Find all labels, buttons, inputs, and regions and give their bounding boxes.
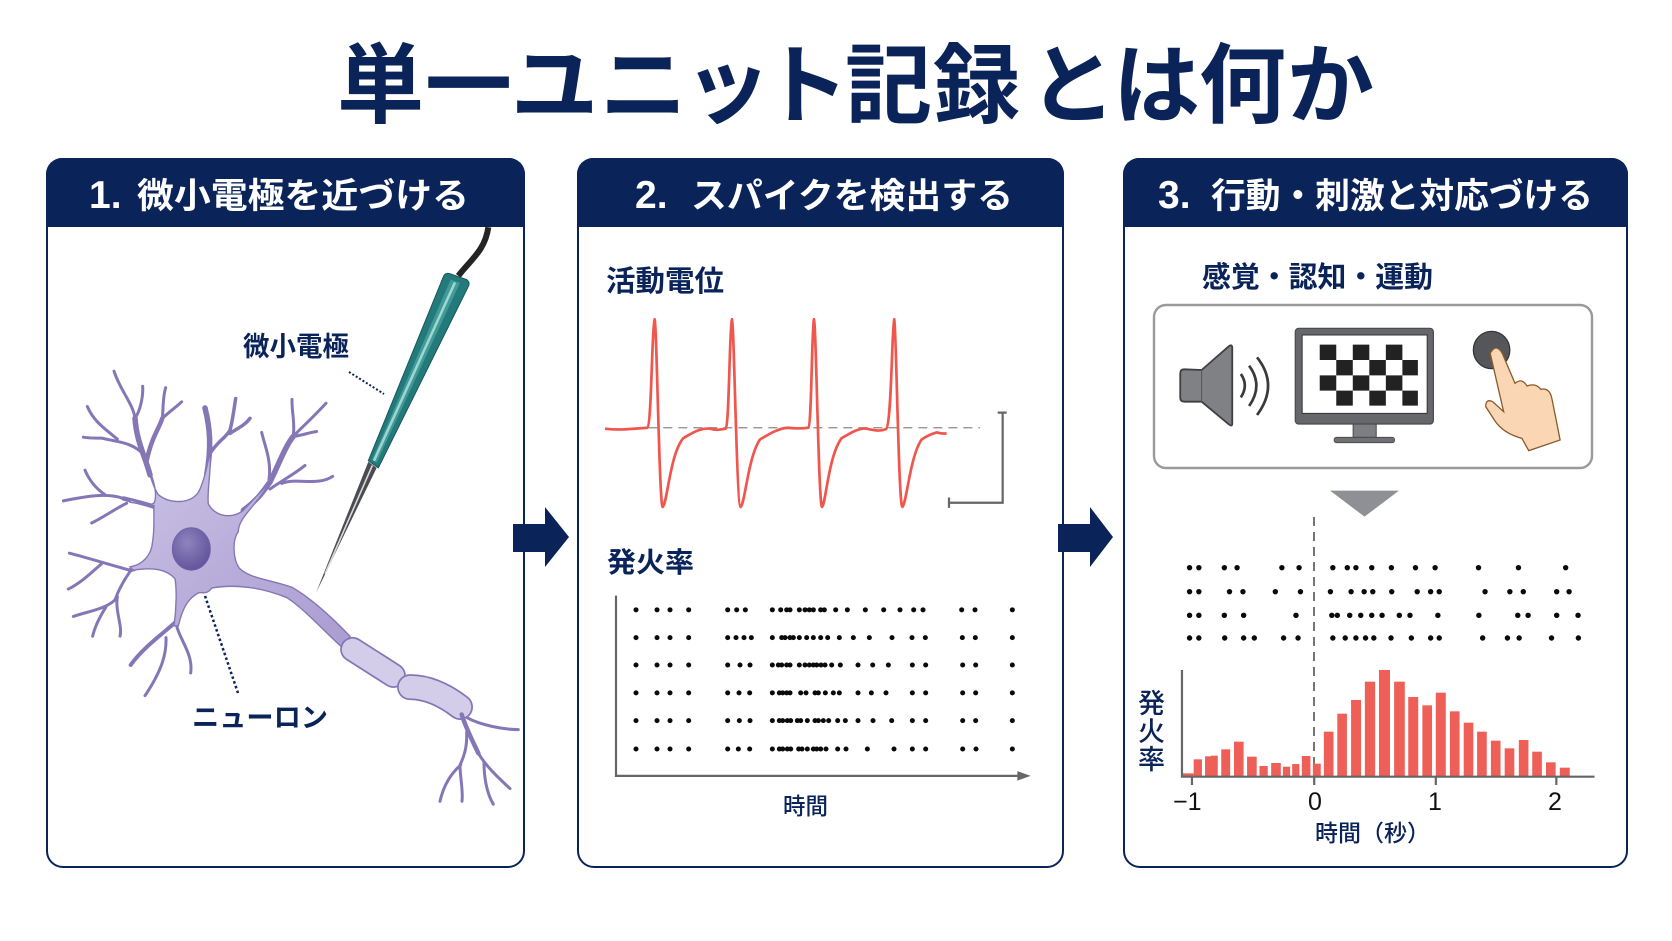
axes bbox=[616, 596, 1022, 776]
microelectrode bbox=[316, 227, 488, 593]
stimulus onset line bbox=[1313, 517, 1315, 777]
icon: monitor bbox=[1295, 328, 1433, 443]
baseline bbox=[648, 427, 980, 429]
arrow: step 2 to 3 bbox=[1058, 507, 1113, 567]
icon: speaker bbox=[1180, 345, 1268, 426]
arrow: step 1 to 2 bbox=[513, 507, 569, 567]
panel frame bbox=[578, 159, 1063, 867]
histogram bars bbox=[1183, 670, 1570, 776]
panel: step 2 detect spikes bbox=[577, 158, 1064, 867]
panel header: スパイクを検出する bbox=[691, 177, 1013, 216]
spike dots bbox=[1190, 568, 1578, 638]
title: 単一ユニット記録とは何か bbox=[337, 38, 1374, 135]
stimulus box bbox=[1154, 305, 1592, 468]
heading: firing rate: 発火率 bbox=[607, 547, 694, 578]
x axis label: time seconds: 時間（秒） bbox=[1315, 820, 1430, 846]
panel header: 3. bbox=[1158, 174, 1191, 217]
panel frame bbox=[47, 159, 524, 867]
panel header: 2. bbox=[635, 174, 668, 217]
myelin sheaths and axon terminal bbox=[353, 649, 518, 804]
needle bbox=[316, 462, 377, 593]
panel header bbox=[577, 158, 1064, 227]
icon: button press bbox=[1473, 331, 1560, 451]
axis arrowhead bbox=[1017, 771, 1031, 781]
nucleus bbox=[172, 528, 210, 570]
heading: sensation cognition movement: 感覚・認知・運動 bbox=[1202, 261, 1433, 294]
panel header: 微小電極を近づける bbox=[137, 177, 469, 216]
cable bbox=[458, 227, 488, 276]
neuron illustration bbox=[63, 371, 518, 804]
voltage trace bbox=[605, 319, 947, 507]
arrow: down triangle bbox=[1330, 491, 1399, 517]
leader: neuron bbox=[205, 596, 238, 693]
label: microelectrode: 微小電極 bbox=[243, 332, 349, 362]
raster plot bbox=[616, 596, 1031, 781]
soma and axon bbox=[130, 451, 350, 648]
panel header: 1. bbox=[89, 174, 122, 217]
spike waveform chart bbox=[605, 319, 1007, 508]
histogram axes bbox=[1182, 670, 1595, 785]
heading: action potential: 活動電位 bbox=[606, 265, 724, 298]
x tick labels: 2 bbox=[1548, 788, 1562, 816]
handle bbox=[368, 273, 469, 468]
x axis label: time: 時間 bbox=[783, 793, 828, 819]
scale bar bbox=[949, 413, 1007, 508]
x tick labels bbox=[1173, 788, 1562, 816]
panel: step 1 approach electrode bbox=[46, 158, 525, 867]
panel header bbox=[1123, 158, 1628, 227]
x tick labels: 0 bbox=[1308, 788, 1322, 816]
panel header bbox=[46, 158, 525, 227]
panel frame bbox=[1124, 159, 1627, 867]
task icons bbox=[1180, 328, 1560, 517]
y axis label: firing rate: 火 bbox=[1138, 717, 1165, 747]
panel header: 行動・刺激と対応づける bbox=[1211, 177, 1593, 216]
spike dots bbox=[636, 610, 1012, 749]
y axis label: firing rate: 率 bbox=[1138, 745, 1165, 775]
leader: microelectrode bbox=[349, 372, 384, 394]
panel: step 3 relate to behavior and stimulus bbox=[1123, 158, 1628, 867]
y axis label: firing rate: 発 bbox=[1138, 689, 1165, 719]
x tick labels: −1 bbox=[1173, 788, 1202, 816]
dendrites bbox=[63, 371, 333, 696]
raster and histogram bbox=[1182, 568, 1595, 785]
label: neuron: ニューロン bbox=[192, 703, 328, 733]
x tick labels: 1 bbox=[1428, 788, 1442, 816]
